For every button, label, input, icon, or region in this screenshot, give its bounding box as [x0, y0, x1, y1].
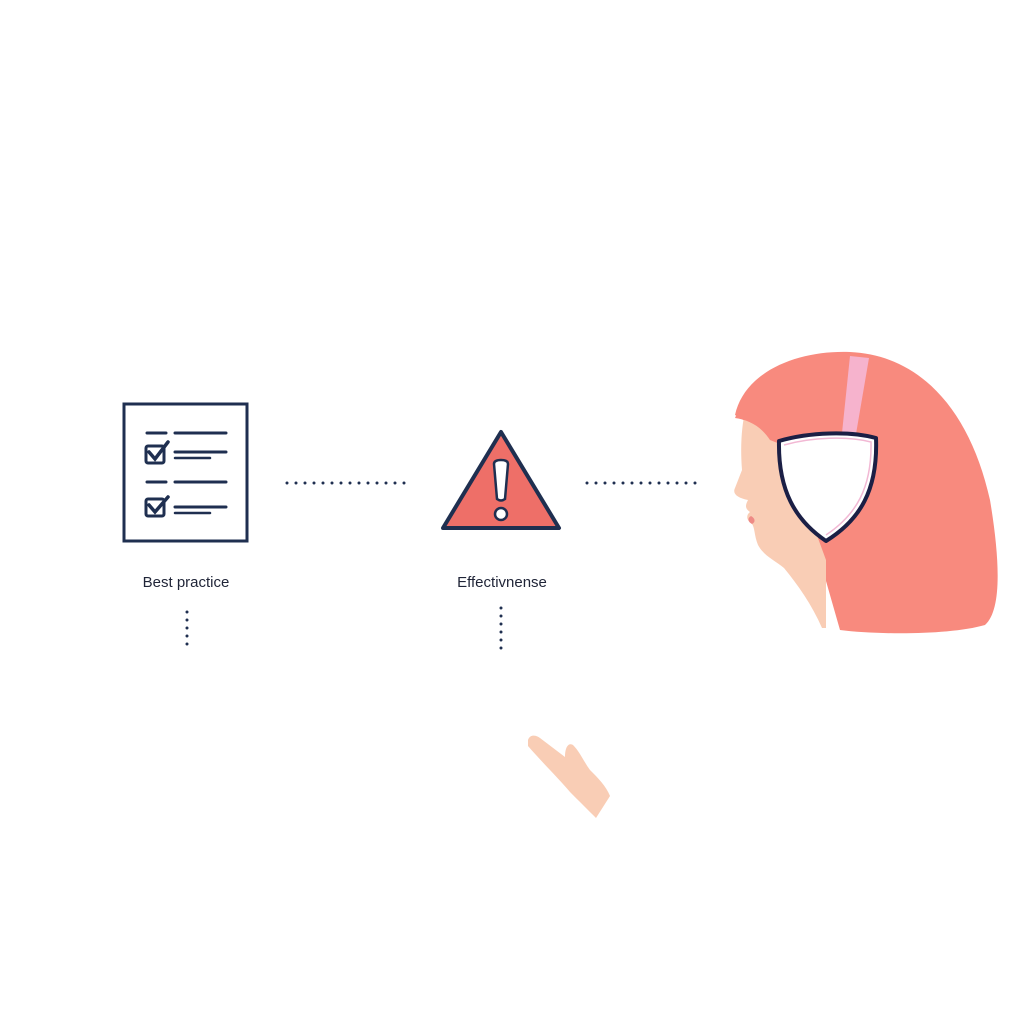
dotted line: under best practice [186, 612, 188, 652]
dotted connector: warning to person [587, 482, 703, 484]
shield earcup [779, 433, 876, 541]
headband [842, 356, 869, 434]
icon: warning triangle [443, 432, 559, 528]
dotted line: under effectiveness [500, 608, 502, 652]
label: effectiveness: Effectivnense [457, 574, 547, 591]
illustration: hand [528, 736, 610, 818]
illustration: woman with shield headphones [734, 352, 998, 633]
label: best practice: Best practice [143, 574, 229, 591]
icon: checklist [124, 404, 247, 541]
dotted connector: checklist to warning [287, 482, 412, 484]
